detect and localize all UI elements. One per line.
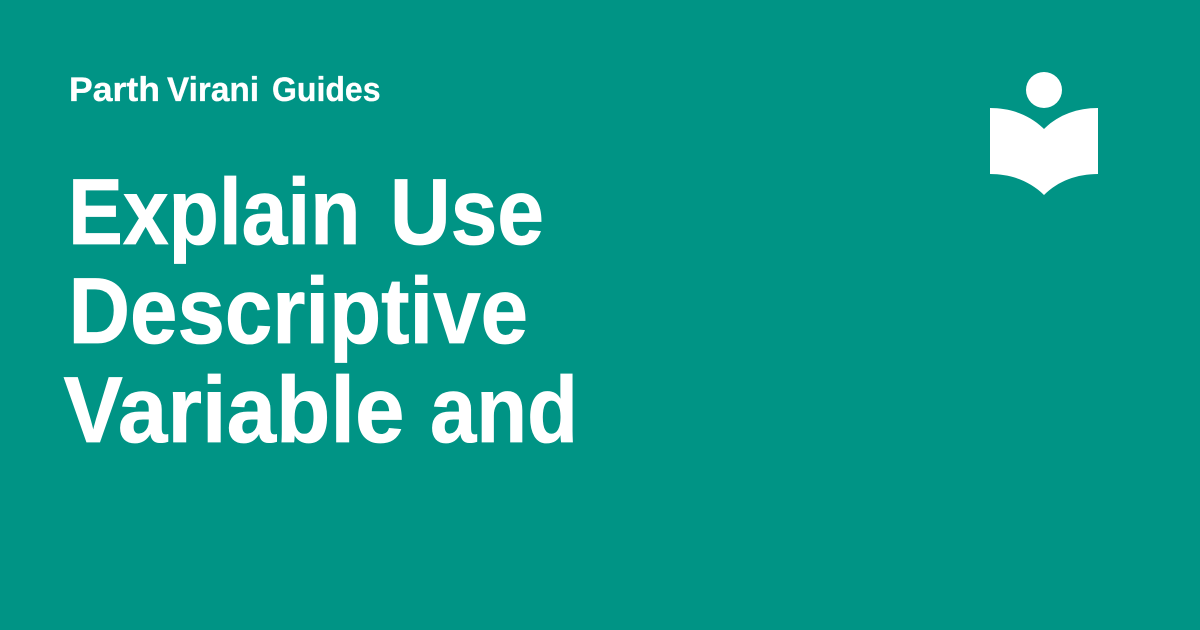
- site name heading: [69, 71, 380, 109]
- site name heading: Virani: [167, 71, 259, 109]
- article title: Explain: [68, 159, 360, 264]
- site name heading: Guides: [272, 71, 380, 109]
- site name heading: Parth: [69, 71, 160, 109]
- article title: and: [430, 357, 578, 462]
- article title: Descriptive: [68, 258, 528, 363]
- article title: Variable: [64, 357, 404, 462]
- icon: person reading book logo: [990, 72, 1098, 195]
- article title: Use: [390, 159, 544, 264]
- article title: [64, 159, 578, 462]
